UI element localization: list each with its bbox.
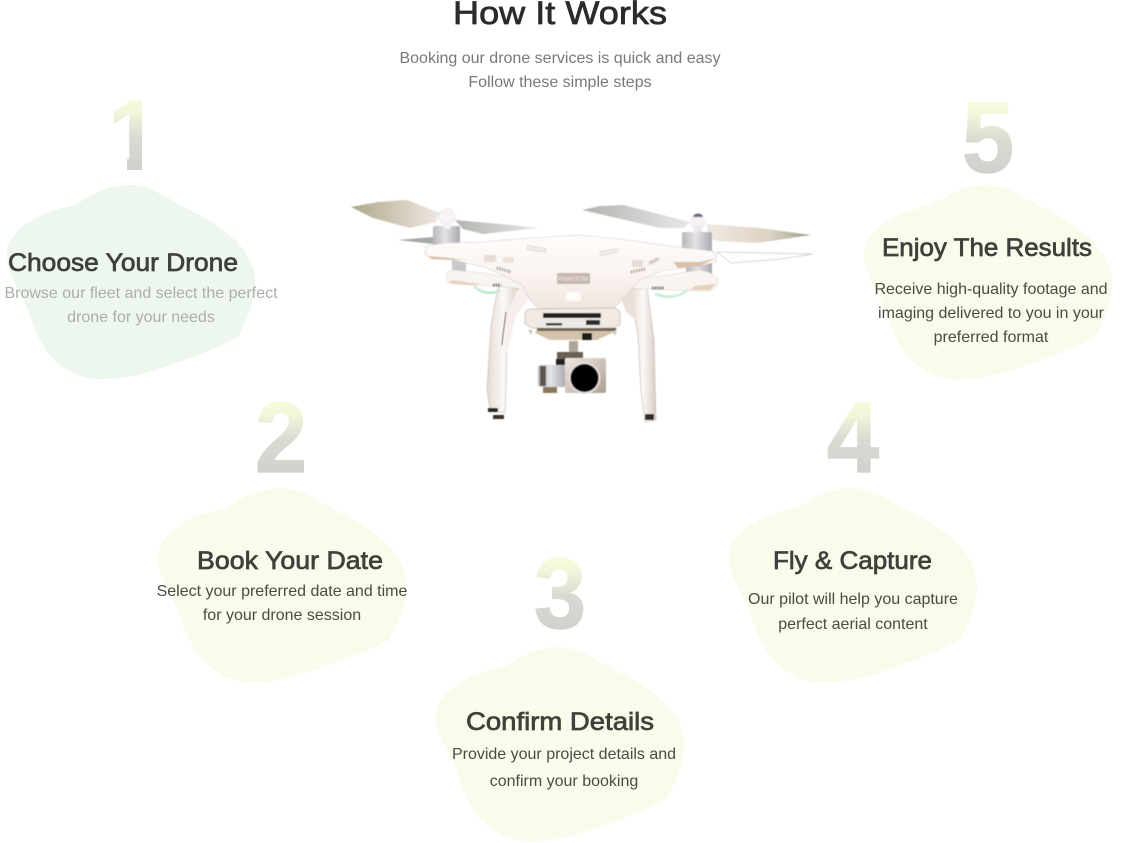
description: Provide your project details and [452, 746, 676, 763]
number 1: 1 [108, 79, 160, 192]
description: confirm your booking [490, 773, 638, 790]
description: Browse our fleet and select the perfect [4, 285, 278, 302]
left propeller [351, 200, 539, 246]
subtitle: Booking our drone services is quick and easy [399, 50, 721, 67]
blob background [864, 185, 1112, 379]
subtitle: Follow these simple steps [468, 74, 652, 91]
step 5 panel: enjoy the results [864, 81, 1112, 379]
description: imaging delivered to you in your [878, 305, 1105, 322]
blob background [436, 647, 684, 841]
drone body [425, 235, 717, 312]
description [4, 285, 278, 326]
heading: Fly & Capture [773, 547, 932, 575]
description: perfect aerial content [778, 616, 928, 633]
blob background [7, 185, 255, 379]
heading: Book Your Date [197, 547, 383, 575]
step 3 panel: confirm details [436, 537, 684, 841]
description: Select your preferred date and time [157, 583, 408, 600]
description: Our pilot will help you capture [748, 591, 958, 608]
step 4 panel: fly and capture [729, 381, 977, 682]
heading: Confirm Details [466, 708, 654, 736]
drone legs [487, 284, 656, 422]
description [874, 281, 1108, 346]
step 2 panel: book your date [157, 381, 408, 682]
description: drone for your needs [67, 309, 215, 326]
description: for your drone session [203, 607, 361, 624]
heading: Choose Your Drone [8, 249, 238, 277]
number 5: 5 [962, 81, 1014, 194]
drone body: PHANTOM [558, 277, 588, 283]
blob background [158, 488, 406, 682]
subtitle [399, 50, 721, 91]
number 2: 2 [255, 381, 307, 494]
description: preferred format [934, 329, 1049, 346]
right propeller [582, 205, 813, 275]
number 3: 3 [534, 537, 586, 650]
description [157, 583, 408, 624]
description [452, 746, 676, 790]
blob background [729, 488, 977, 682]
lower arms [446, 259, 718, 298]
description [748, 591, 958, 633]
gimbal plate [525, 308, 620, 340]
number 4: 4 [827, 381, 879, 494]
icon: drone photo [351, 200, 813, 422]
camera gimbal [538, 341, 606, 394]
step 1 panel: choose your drone [4, 79, 278, 379]
heading: Enjoy The Results [882, 234, 1092, 262]
description: Receive high-quality footage and [874, 281, 1108, 298]
